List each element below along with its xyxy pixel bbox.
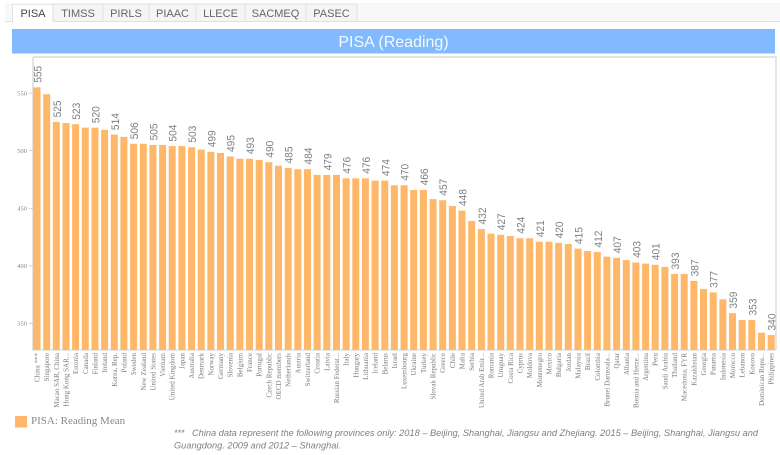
country labels: Romania (488, 352, 496, 378)
country labels: Croatia (314, 352, 322, 374)
value labels: 427 (496, 213, 508, 230)
tab bar: PIAAC (156, 8, 189, 20)
title banner: PISA (Reading) (338, 34, 449, 51)
y axis: 450 (17, 206, 27, 212)
country labels: Georgia (700, 352, 708, 375)
country labels: Turkey (420, 353, 428, 373)
country labels: Bulgaria (555, 352, 563, 377)
value labels: 424 (516, 217, 528, 234)
country labels: Peru (652, 353, 660, 366)
value labels: 415 (574, 227, 586, 244)
country labels: Canada (82, 352, 90, 374)
country labels: Montenegro (536, 353, 544, 387)
value labels: 401 (651, 243, 663, 260)
country labels: Thailand (671, 353, 679, 378)
value labels: 520 (90, 106, 102, 123)
country labels: Russian Federat... (333, 353, 341, 403)
value labels: 505 (148, 123, 160, 140)
country labels: Germany (217, 353, 225, 379)
value labels: 490 (264, 141, 276, 158)
country labels: Latvia (323, 352, 331, 371)
y axis: 550 (17, 90, 27, 97)
value labels: 479 (322, 153, 334, 170)
country labels: Serbia (468, 352, 476, 371)
value labels: 476 (342, 157, 354, 174)
country labels: Slovak Republic (430, 353, 438, 399)
footnote: Guangdong. 2009 and 2012 – Shanghai. (174, 440, 341, 450)
tab bar: PIRLS (110, 8, 142, 20)
value labels: 470 (400, 164, 412, 181)
country labels: Finland (92, 353, 100, 374)
value labels: 421 (535, 220, 547, 237)
country labels: Poland (120, 353, 128, 372)
value labels: 387 (689, 259, 701, 276)
country labels: Dominican Repu... (758, 353, 766, 406)
country labels: Lebanon (739, 353, 747, 378)
country labels: Panama (710, 352, 718, 375)
country labels: Brunei Darussala... (603, 353, 611, 407)
country labels: Qatar (613, 352, 621, 369)
footnote (174, 428, 759, 450)
country labels: Macao SAR, China (53, 352, 61, 408)
value labels: 555 (32, 66, 44, 83)
bar chart (34, 87, 775, 350)
country labels: Moldova (526, 352, 534, 378)
country labels: Estonia (72, 352, 80, 374)
country labels: New Zealand (140, 353, 148, 391)
country labels: Italy (343, 353, 351, 366)
value labels: 499 (206, 130, 218, 147)
country labels: Norway (207, 353, 215, 376)
country labels: Indonesia (719, 352, 727, 380)
country labels: Belarus (381, 353, 389, 374)
country labels: Switzerland (304, 353, 312, 386)
value labels: 514 (110, 113, 122, 130)
value labels: 432 (477, 208, 489, 224)
country labels: Mexico (546, 353, 554, 374)
value labels: 403 (631, 241, 643, 258)
title banner (12, 29, 775, 54)
country labels: Lithuania (362, 352, 370, 380)
value labels: 377 (709, 271, 721, 288)
value labels: 340 (767, 314, 779, 330)
value labels: 359 (728, 292, 740, 309)
country labels: Singapore (43, 353, 51, 381)
y axis: 350 (17, 321, 27, 328)
value labels (32, 66, 779, 331)
country labels: Ireland (101, 353, 109, 373)
country labels: Sweden (130, 353, 138, 375)
value labels: 503 (187, 126, 199, 143)
value labels: 523 (71, 103, 83, 120)
country labels: Chile (449, 353, 457, 368)
country labels: Israel (391, 353, 399, 369)
country labels: Netherlands (285, 353, 293, 387)
value labels: 484 (303, 148, 315, 165)
value labels: 393 (670, 252, 682, 270)
country labels: Luxembourg (401, 353, 409, 389)
country labels: Czech Republic (265, 353, 273, 398)
country labels (34, 352, 776, 408)
value labels: 493 (245, 137, 257, 154)
country labels: Philippines (768, 353, 776, 385)
country labels: Malta (458, 352, 466, 369)
country labels: Belgium (236, 352, 244, 377)
value labels: 448 (458, 189, 470, 206)
country labels: Kosovo (748, 353, 756, 375)
country labels: Bosnia and Herze... (632, 353, 640, 408)
legend: PISA: Reading Mean (31, 415, 126, 427)
tab bar: PISA (20, 8, 46, 20)
country labels: France (246, 353, 254, 372)
plot frame (33, 57, 776, 350)
tab bar: LLECE (203, 8, 238, 20)
country labels: Hong Kong SAR... (62, 353, 70, 406)
tab bar (5, 3, 780, 22)
country labels: Macedonia, FYR (681, 353, 689, 401)
country labels: Greece (439, 353, 447, 373)
tab bar: TIMSS (61, 8, 95, 20)
country labels: Ukraine (410, 353, 418, 376)
country labels: United Kingdom (169, 352, 177, 400)
country labels: China *** (34, 353, 42, 382)
value labels: 525 (52, 100, 64, 117)
country labels: Albania (623, 352, 631, 375)
country labels: Argentina (642, 352, 650, 381)
y axis (17, 90, 33, 328)
tab bar: SACMEQ (252, 8, 300, 20)
country labels: Colombia (594, 352, 602, 381)
country labels: Vietnam (159, 352, 167, 377)
country labels: Saudi Arabia (661, 352, 669, 389)
country labels: Korea, Rep. (111, 353, 119, 387)
country labels: Brazil (584, 353, 592, 370)
y axis: 400 (17, 263, 27, 270)
country labels: Kazakhstan (690, 353, 698, 386)
value labels: 485 (284, 146, 296, 164)
country labels: Jordan (565, 353, 573, 372)
country labels: Portugal (256, 353, 264, 377)
value labels: 474 (380, 159, 392, 176)
country labels: Austria (294, 352, 302, 374)
country labels: Cyprus (516, 353, 524, 373)
country labels: Uruguay (497, 353, 505, 378)
footnote: China data represent the following provinces only: 2018 – Beijing, Shanghai, Jiangsu and Zhejiang. 2015 – Beijing, Shanghai, Jiangsu and (192, 428, 759, 438)
country labels: Iceland (372, 353, 380, 374)
country labels: United States (149, 353, 157, 391)
value labels: 506 (129, 122, 141, 139)
value labels: 353 (747, 298, 759, 316)
value labels: 466 (419, 168, 431, 185)
country labels: Hungary (352, 353, 360, 378)
country labels: OECD members (275, 353, 283, 399)
y axis: 500 (17, 148, 27, 155)
country labels: Costa Rica (507, 352, 515, 384)
country labels: Denmark (198, 353, 206, 379)
country labels: Slovenia (227, 352, 235, 378)
country labels: Japan (178, 353, 186, 369)
country labels: Malaysia (574, 352, 582, 379)
value labels: 495 (226, 135, 238, 152)
tab bar: PASEC (313, 8, 350, 20)
country labels: United Arab Emir... (478, 353, 486, 408)
country labels: Australia (188, 352, 196, 379)
country labels: Morocco (729, 353, 737, 378)
value labels: 476 (361, 157, 373, 174)
footnote: *** (174, 428, 185, 438)
value labels: 457 (438, 179, 450, 196)
value labels: 504 (168, 125, 180, 142)
value labels: 412 (593, 231, 605, 248)
value labels: 407 (612, 236, 624, 253)
value labels: 420 (554, 221, 566, 238)
